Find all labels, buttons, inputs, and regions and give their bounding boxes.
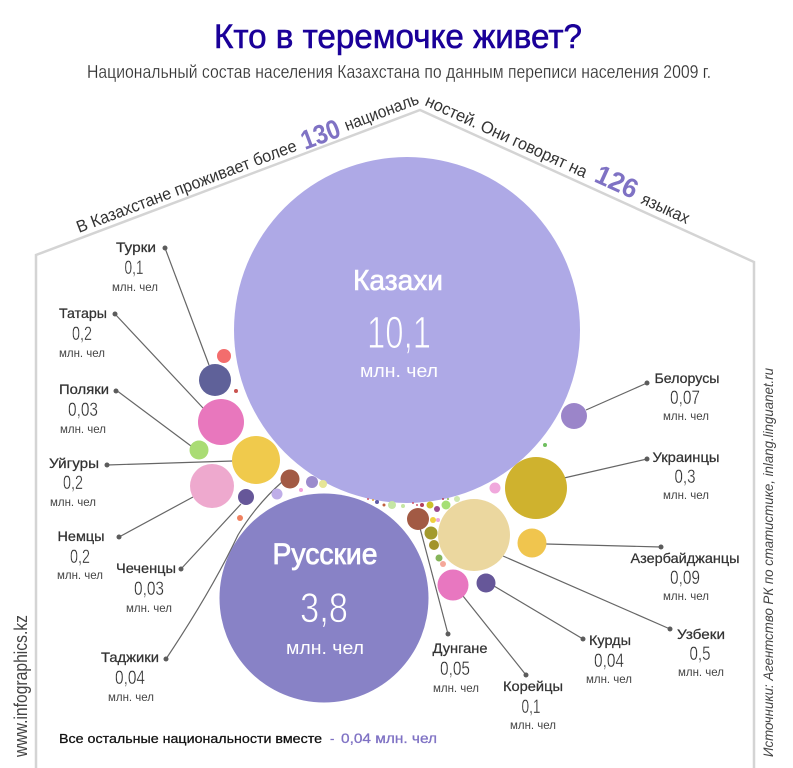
label: Dungans	[432, 632, 488, 695]
label: Azerbaijanis: 0,09	[670, 568, 700, 589]
label: Koreans	[503, 672, 563, 732]
label: Azerbaijanis: млн. чел	[663, 591, 709, 603]
label: Poles	[59, 381, 118, 436]
note: all other nationalities	[59, 730, 437, 746]
label: Turks: 0,1	[124, 258, 144, 279]
label: Tajiks: млн. чел	[108, 692, 154, 704]
label: Germans: Немцы	[58, 528, 104, 544]
label: Belarusians: Белорусы	[654, 370, 720, 386]
label: Kazakhs	[353, 265, 443, 381]
note: all other nationalities: Все остальные национальности вместе	[59, 731, 322, 746]
label: Tatars: Татары	[59, 305, 107, 321]
label: Uzbeks	[668, 626, 725, 679]
label: Uighurs: Уйгуры	[49, 455, 99, 471]
label: Dungans: Дунгане	[432, 640, 488, 656]
label: Kurds: 0,04	[594, 651, 624, 672]
label: Azerbaijanis: Азербайджанцы	[630, 550, 740, 566]
label: Uzbeks: Узбеки	[677, 626, 725, 642]
label: Ukrainians: млн. чел	[663, 490, 709, 502]
label: Koreans: млн. чел	[510, 720, 556, 732]
label: Kurds: млн. чел	[586, 674, 632, 686]
label: Belarusians: 0,07	[670, 388, 700, 409]
bubble: Kazakhs	[234, 157, 580, 503]
label: Uighurs: 0,2	[63, 473, 83, 494]
house outline	[36, 110, 754, 768]
note: all other nationalities: 0,04 млн. чел	[341, 730, 437, 746]
small bubbles: right cluster	[367, 403, 587, 600]
label: Koreans: Корейцы	[503, 678, 563, 694]
label: Uighurs	[49, 455, 110, 509]
label: Russians: 3,8	[300, 584, 348, 631]
label: Poles: млн. чел	[60, 424, 106, 436]
label: Dungans: 0,05	[440, 659, 470, 680]
label: Uzbeks: млн. чел	[678, 667, 724, 679]
label: Ukrainians	[644, 449, 720, 502]
label: Tatars: млн. чел	[59, 348, 105, 360]
label: Chechens: 0,03	[134, 579, 164, 600]
label: Poles: 0,03	[68, 400, 98, 421]
label: Kazakhs: Казахи	[353, 265, 443, 297]
label: Turks	[112, 239, 168, 294]
leader lines	[107, 248, 670, 675]
roof text: right slope	[422, 91, 693, 228]
label: Tatars: 0,2	[72, 324, 92, 345]
label: Turks: Турки	[116, 239, 156, 255]
label: Tajiks: Таджики	[101, 649, 159, 665]
label: Belarusians: млн. чел	[663, 411, 709, 423]
roof text: left slope	[74, 89, 421, 237]
subtitle: Национальный состав населения Казахстана по данным переписи населения 2009 г.	[87, 62, 711, 82]
roof text: right slope: 126	[591, 159, 643, 205]
sources: Источники: Агентство РК по статистике, inlang.linguanet.ru	[760, 368, 776, 757]
roof text: left slope: националь	[342, 89, 421, 135]
title: Кто в теремочке живет?	[214, 18, 582, 56]
label: Chechens: Чеченцы	[116, 560, 176, 576]
label: Russians: млн. чел	[286, 638, 364, 658]
label: Ukrainians: Украинцы	[652, 449, 720, 465]
note: all other nationalities: -	[330, 731, 334, 746]
label: Dungans: млн. чел	[433, 683, 479, 695]
label: Russians	[272, 538, 378, 658]
label: Azerbaijanis	[630, 544, 740, 603]
label: Kazakhs: млн. чел	[360, 361, 438, 381]
label: Chechens: млн. чел	[126, 603, 172, 615]
label: Kurds	[580, 632, 632, 686]
roof text: left slope: 130	[297, 113, 345, 156]
label: Uzbeks: 0,5	[690, 644, 710, 665]
label: Germans: млн. чел	[57, 570, 103, 582]
roof text: right slope: ностей. Они говорят на	[422, 91, 591, 182]
roof text: left slope: В Казахстане проживает более	[74, 136, 299, 237]
label: Ukrainians: 0,3	[674, 467, 696, 488]
label: Tajiks	[101, 649, 168, 704]
label: Germans: 0,2	[70, 547, 90, 568]
label: Germans	[57, 528, 122, 582]
bubble: Russians	[220, 494, 428, 702]
roof text: right slope: языках	[638, 189, 693, 228]
label: Kurds: Курды	[589, 632, 631, 648]
label: Russians: Русские	[272, 538, 378, 571]
site credit: www.infographics.kz	[11, 615, 31, 758]
label: Uighurs: млн. чел	[50, 497, 96, 509]
label: Turks: млн. чел	[112, 282, 158, 294]
label: Kazakhs: 10,1	[367, 307, 431, 358]
label: Koreans: 0,1	[522, 697, 540, 718]
small bubbles: left cluster	[190, 349, 327, 521]
label: Tatars	[59, 305, 118, 360]
label: Belarusians	[644, 370, 720, 423]
label: Tajiks: 0,04	[115, 668, 145, 689]
label: Poles: Поляки	[59, 381, 109, 397]
label: Chechens	[116, 560, 184, 615]
